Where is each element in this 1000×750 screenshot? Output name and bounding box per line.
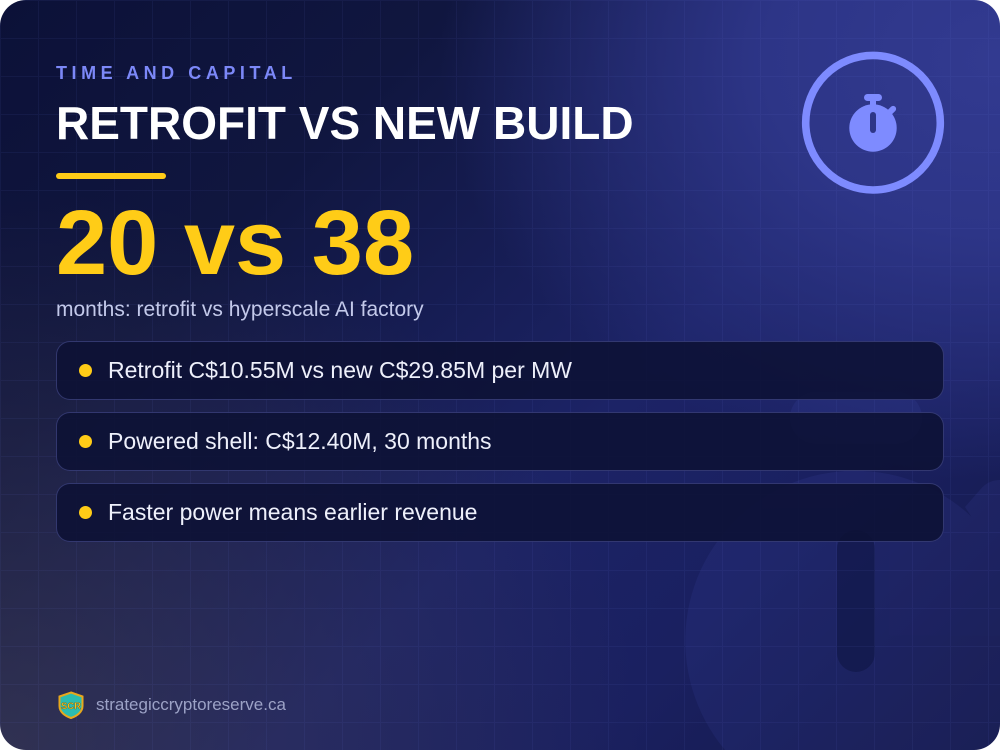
bullet: retrofit cost bbox=[56, 341, 944, 400]
logo: SCR shield bbox=[58, 692, 84, 719]
bullet: powered shell bbox=[56, 412, 944, 471]
headline statistic: 20 vs 38 bbox=[56, 192, 414, 294]
bullet text: Powered shell: C$12.40M, 30 months bbox=[108, 428, 492, 454]
footer website: strategiccryptoreserve.ca bbox=[96, 695, 286, 714]
bullet: earlier revenue bbox=[56, 483, 944, 542]
statistic caption: months: retrofit vs hyperscale AI factory bbox=[56, 298, 424, 321]
bullet text: Retrofit C$10.55M vs new C$29.85M per MW bbox=[108, 357, 572, 383]
title: RETROFIT VS NEW BUILD bbox=[56, 97, 634, 149]
eyebrow label: TIME AND CAPITAL bbox=[56, 63, 297, 83]
bullet dot bbox=[79, 364, 92, 377]
bullet dot bbox=[79, 506, 92, 519]
logo: SCR shield: SCR bbox=[61, 701, 81, 712]
bullet dot bbox=[79, 435, 92, 448]
accent divider bbox=[56, 173, 166, 179]
icon: stopwatch in ring bbox=[802, 52, 944, 194]
bullet text: Faster power means earlier revenue bbox=[108, 499, 477, 525]
